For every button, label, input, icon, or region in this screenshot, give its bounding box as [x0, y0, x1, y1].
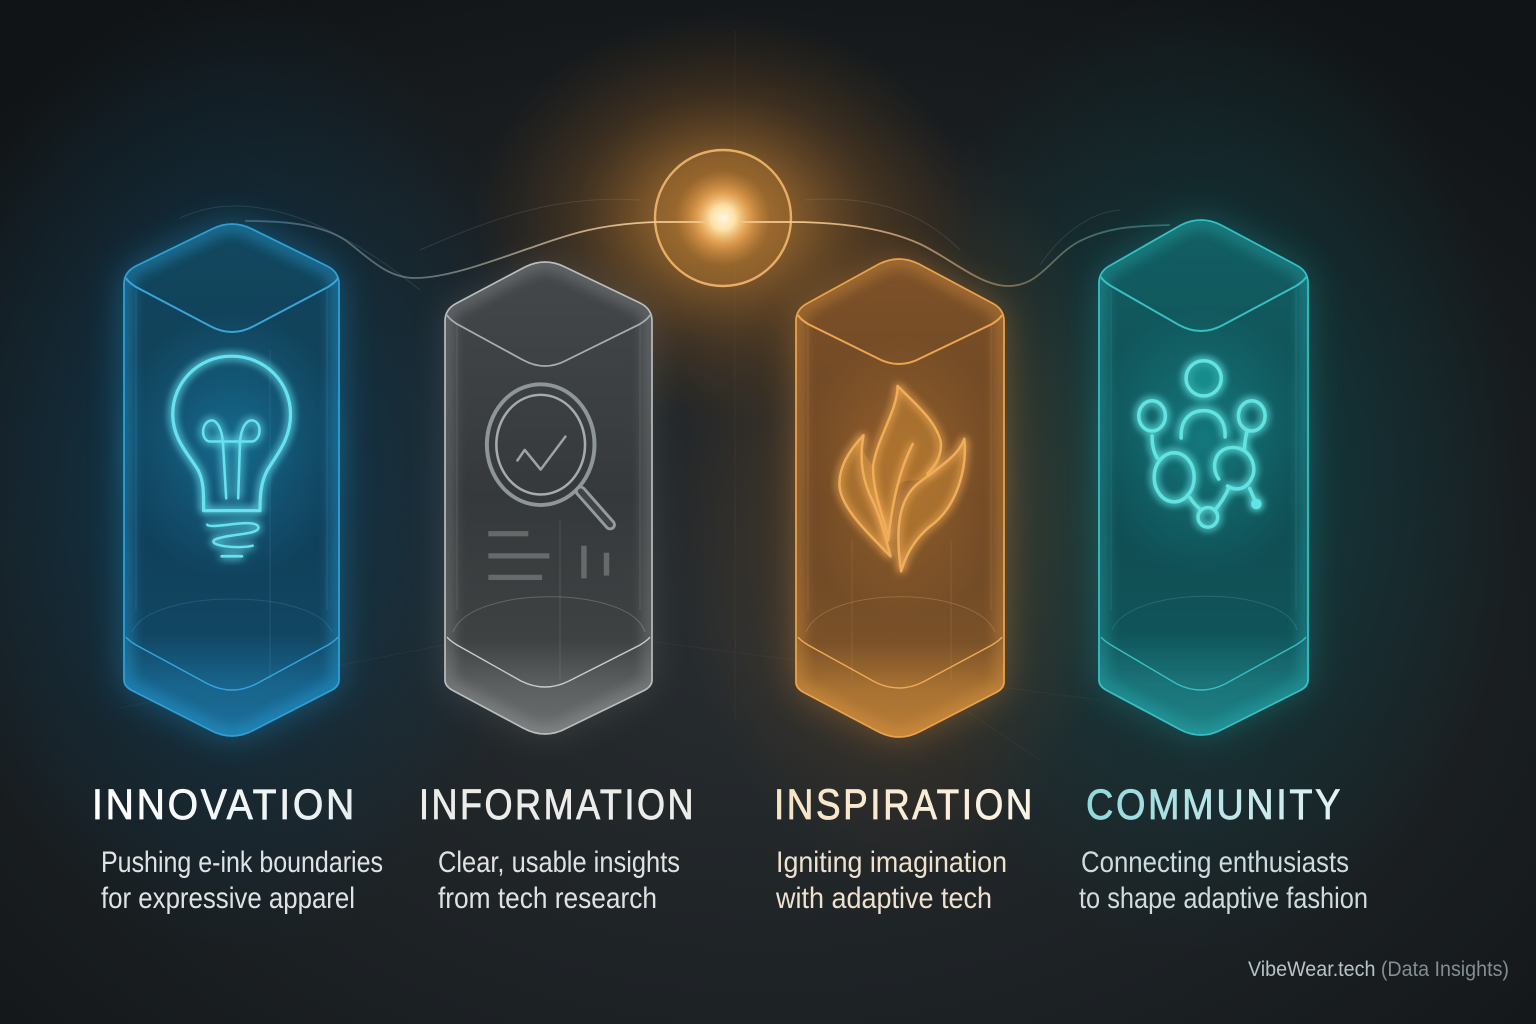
description: community: to shape adaptive fashion	[1079, 882, 1368, 915]
description: community	[1079, 846, 1368, 915]
label: innovation	[92, 781, 383, 915]
description: inspiration	[775, 846, 1007, 915]
icon: magnifier with trend line	[487, 384, 610, 578]
description: information: from tech research	[438, 882, 657, 915]
description: community: Connecting enthusiasts	[1081, 846, 1349, 879]
pillar: innovation	[108, 224, 355, 736]
label: information	[419, 781, 696, 915]
heading: innovation: INNOVATION	[92, 781, 357, 829]
attribution: VibeWear.tech (Data Insights)	[1248, 958, 1509, 981]
sun node with connecting curves	[180, 13, 1170, 423]
label: community	[1079, 781, 1368, 915]
heading: community: COMMUNITY	[1086, 781, 1343, 829]
description: inspiration: with adaptive tech	[775, 882, 992, 915]
icon: light bulb	[108, 312, 355, 579]
description: inspiration: Igniting imagination	[776, 846, 1007, 879]
pillar: information	[445, 262, 652, 734]
connecting curve: left	[245, 221, 705, 278]
heading: inspiration: INSPIRATION	[774, 781, 1035, 829]
description: innovation: for expressive apparel	[101, 882, 355, 915]
connecting curve: right	[741, 222, 1170, 286]
icon: flame	[787, 337, 1019, 618]
heading: information: INFORMATION	[419, 781, 696, 829]
icon: connected community	[1084, 309, 1322, 576]
description: information: Clear, usable insights	[438, 846, 680, 879]
description: innovation: Pushing e-ink boundaries	[101, 846, 383, 879]
label: inspiration	[774, 781, 1035, 915]
pillar: community	[1084, 220, 1322, 735]
description: innovation	[101, 846, 383, 915]
description: information	[438, 846, 680, 915]
pillar: inspiration	[787, 259, 1019, 737]
